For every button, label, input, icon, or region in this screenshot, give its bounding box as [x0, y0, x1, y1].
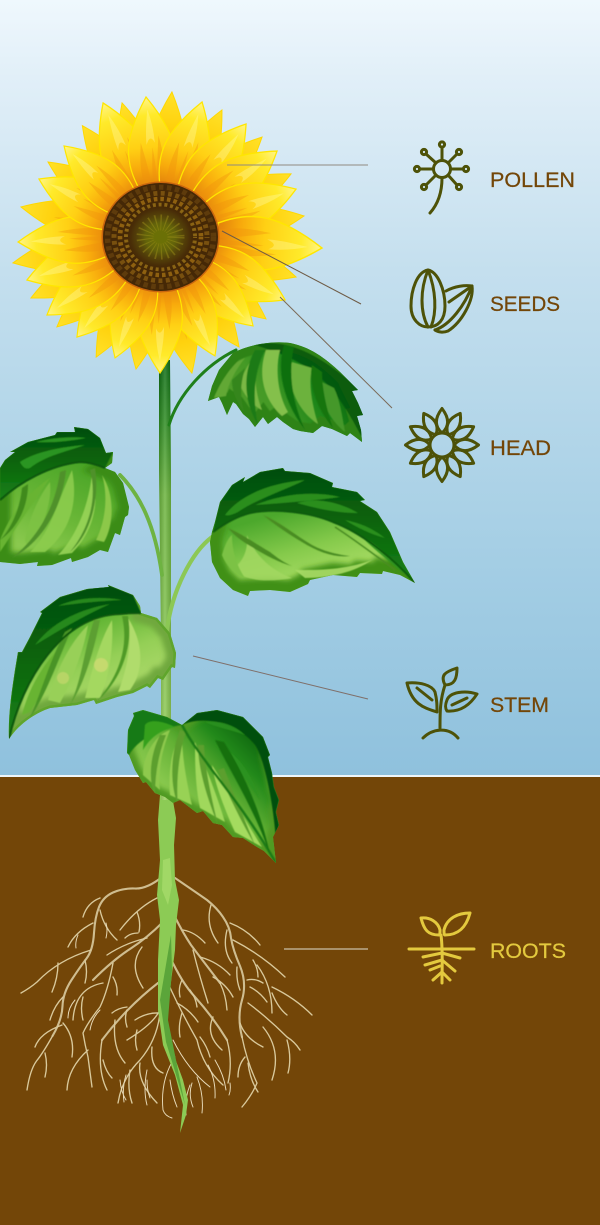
leader line: roots — [284, 948, 368, 950]
leaf: upper right — [208, 342, 366, 445]
leader line: head — [280, 297, 392, 408]
leaf: bottom — [127, 710, 279, 863]
leaf: lower left — [9, 585, 176, 739]
front petals — [17, 94, 324, 373]
seed disk — [102, 182, 220, 292]
icon: seeds — [411, 270, 472, 332]
icon: pollen — [414, 142, 469, 213]
leader line: pollen — [227, 164, 368, 166]
leaf petioles — [120, 350, 236, 630]
main stem — [159, 360, 171, 800]
icon: roots — [409, 913, 474, 983]
label: pollen: POLLEN — [490, 168, 575, 192]
label: head: HEAD — [490, 436, 551, 460]
icon: flower head — [406, 408, 478, 482]
taproot and underground stem — [157, 795, 188, 1133]
sunflower plant — [0, 90, 415, 1133]
sunflower head — [10, 90, 324, 377]
label: seeds: SEEDS — [490, 292, 560, 316]
icon: stem — [407, 668, 477, 738]
back petals — [10, 90, 307, 377]
label: stem: STEM — [490, 693, 549, 717]
label: roots: ROOTS — [490, 939, 566, 963]
soil background — [0, 777, 600, 1225]
root system — [21, 877, 312, 1118]
leaf: left — [0, 427, 129, 566]
sky background — [0, 0, 600, 775]
leader line: stem — [193, 656, 368, 699]
ground horizon line — [0, 775, 600, 777]
leader line: seeds — [222, 231, 361, 304]
leaf: right large — [210, 468, 415, 596]
